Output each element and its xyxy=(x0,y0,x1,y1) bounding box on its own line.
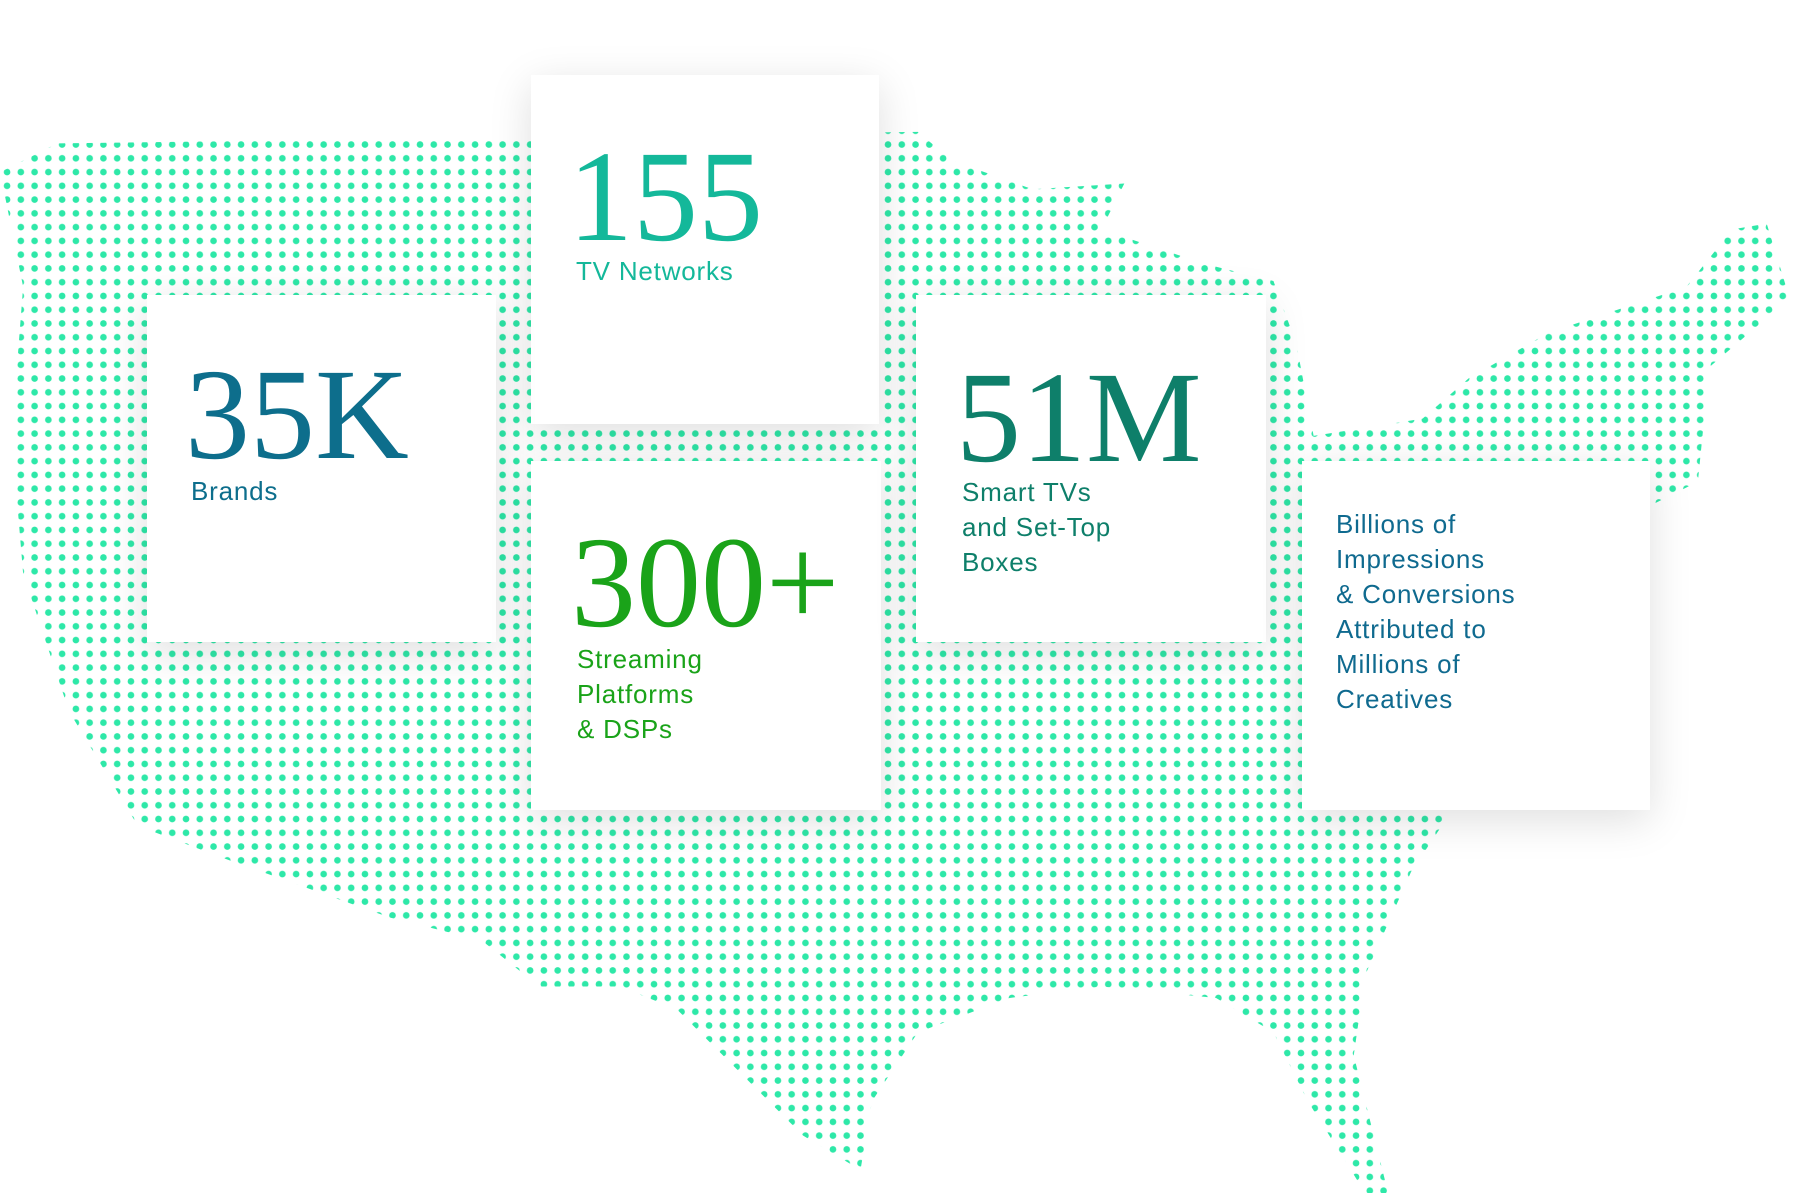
label: streaming: Streaming xyxy=(577,644,703,674)
label: Brands: Brands xyxy=(191,476,278,506)
label: TV Networks: TV Networks xyxy=(576,256,734,286)
label: smart TVs xyxy=(962,477,1111,577)
card: brands xyxy=(147,295,496,642)
stat: 155: 155 xyxy=(568,125,763,269)
label: streaming: & DSPs xyxy=(577,714,673,744)
card: TV networks xyxy=(531,75,879,424)
card: streaming xyxy=(531,461,881,810)
stat: 35K: 35K xyxy=(185,343,409,487)
label: smart TVs: Smart TVs xyxy=(962,477,1092,507)
stat: 51M: 51M xyxy=(956,346,1202,490)
label: billions: Impressions xyxy=(1336,544,1485,574)
label: streaming xyxy=(577,644,703,744)
label: billions: Billions of xyxy=(1336,509,1456,539)
label: billions: Creatives xyxy=(1336,684,1453,714)
label: billions: Attributed to xyxy=(1336,614,1487,644)
label: billions xyxy=(1336,509,1515,714)
card: smart TVs xyxy=(916,295,1266,642)
card: billions xyxy=(1302,461,1650,810)
label: streaming: Platforms xyxy=(577,679,694,709)
label: billions: Millions of xyxy=(1336,649,1460,679)
label: billions: & Conversions xyxy=(1336,579,1515,609)
label: smart TVs: Boxes xyxy=(962,547,1038,577)
stat: 300+: 300+ xyxy=(571,511,839,655)
label: smart TVs: and Set-Top xyxy=(962,512,1111,542)
